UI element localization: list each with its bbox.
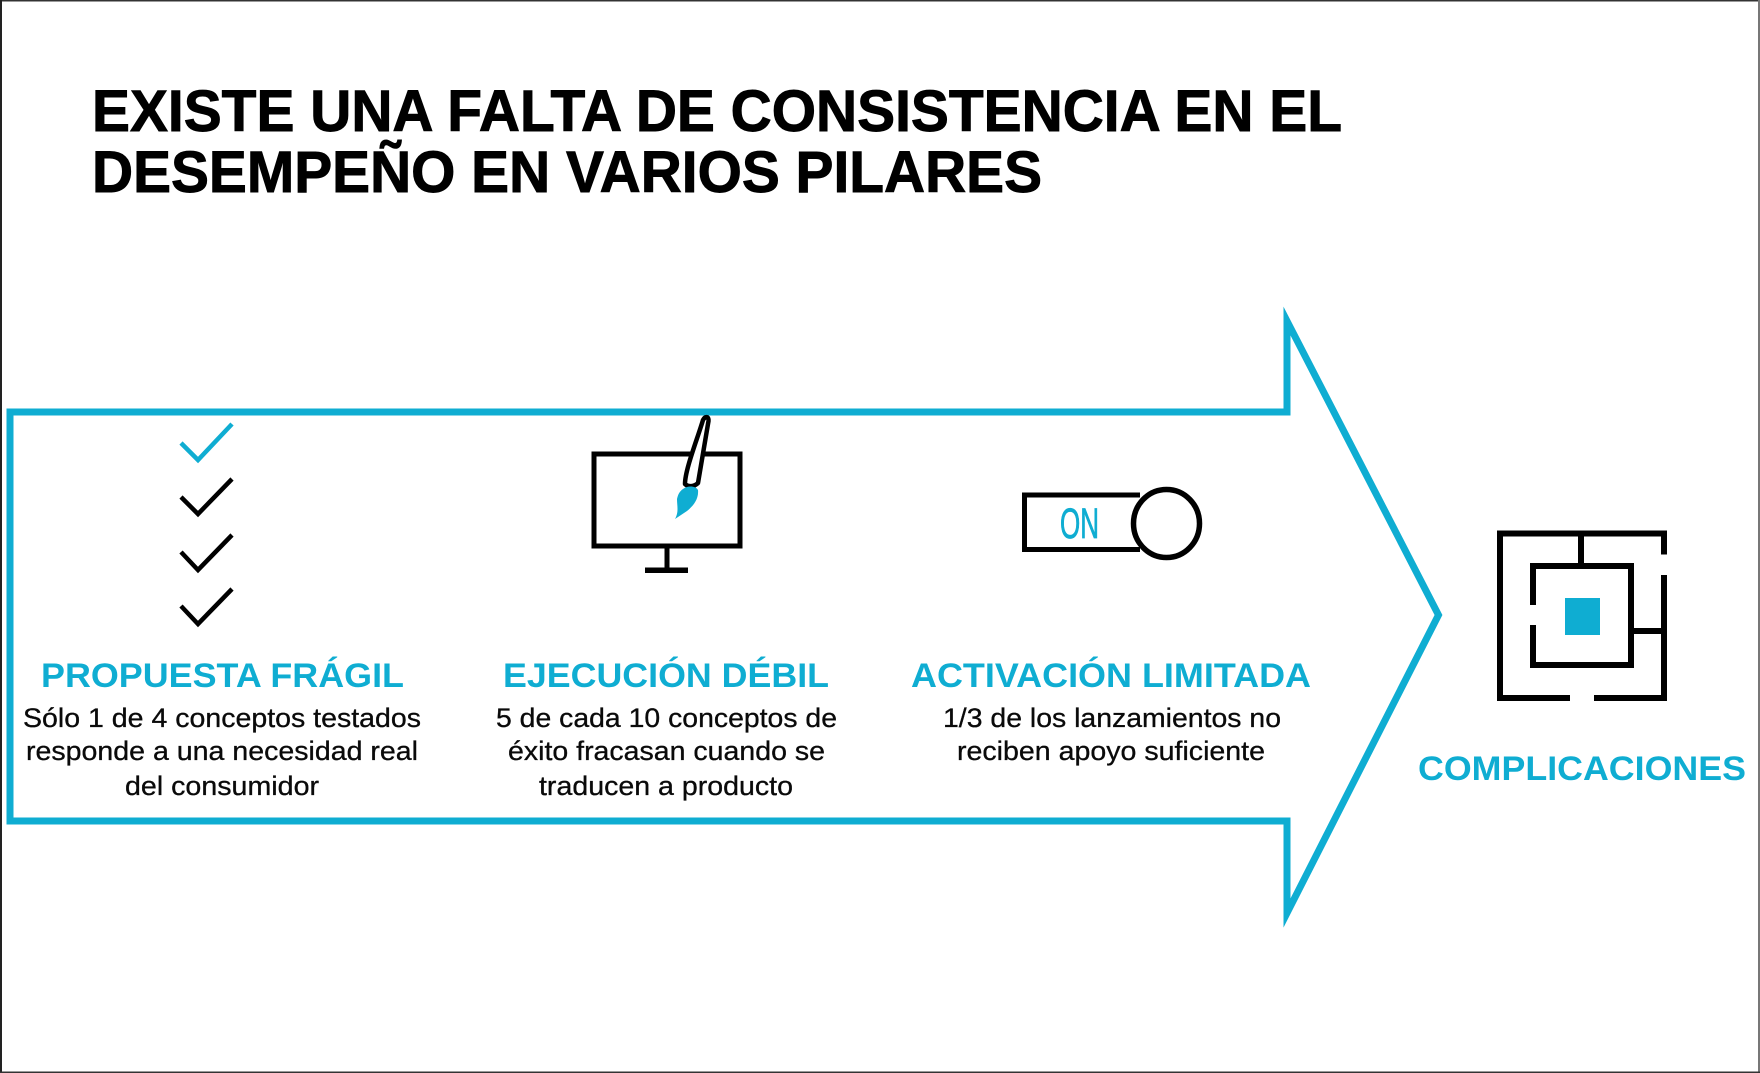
heading: complicaciones: COMPLICACIONES <box>1418 750 1746 788</box>
icon: maze with cyan center <box>1500 534 1664 698</box>
panel: propuesta frágil <box>23 424 421 801</box>
title: EXISTE UNA FALTA DE CONSISTENCIA EN EL <box>92 79 1342 144</box>
arrow outline <box>10 321 1438 913</box>
panel: complicaciones <box>1418 534 1746 788</box>
text: activación limitada description <box>943 703 1281 766</box>
text: ejecución débil description <box>496 703 837 801</box>
text: activación limitada description: 1/3 de los lanzamientos no <box>943 703 1281 733</box>
text: ejecución débil description: éxito fracasan cuando se <box>508 736 825 766</box>
heading: ejecución débil: EJECUCIÓN DÉBIL <box>503 657 829 695</box>
icon: four check marks <box>181 424 232 624</box>
text: propuesta frágil description: Sólo 1 de 4 conceptos testados <box>23 703 421 733</box>
heading: propuesta frágil: PROPUESTA FRÁGIL <box>41 657 404 695</box>
panel: ejecución débil <box>496 417 837 801</box>
text: activación limitada description: reciben apoyo suficiente <box>957 736 1265 766</box>
text: propuesta frágil description: responde a una necesidad real <box>26 736 418 766</box>
title: DESEMPEÑO EN VARIOS PILARES <box>92 140 1042 205</box>
text: ejecución débil description: traducen a producto <box>539 771 793 801</box>
icon: monitor with paintbrush <box>594 417 740 573</box>
text: ejecución débil description: 5 de cada 10 conceptos de <box>496 703 837 733</box>
heading: activación limitada: ACTIVACIÓN LIMITADA <box>911 657 1311 695</box>
title <box>92 79 1342 205</box>
text: propuesta frágil description <box>23 703 421 801</box>
icon: on toggle switch <box>1024 490 1200 558</box>
panel: activación limitada <box>911 490 1311 766</box>
icon: on toggle switch: ON <box>1060 500 1099 548</box>
text: propuesta frágil description: del consumidor <box>125 771 319 801</box>
